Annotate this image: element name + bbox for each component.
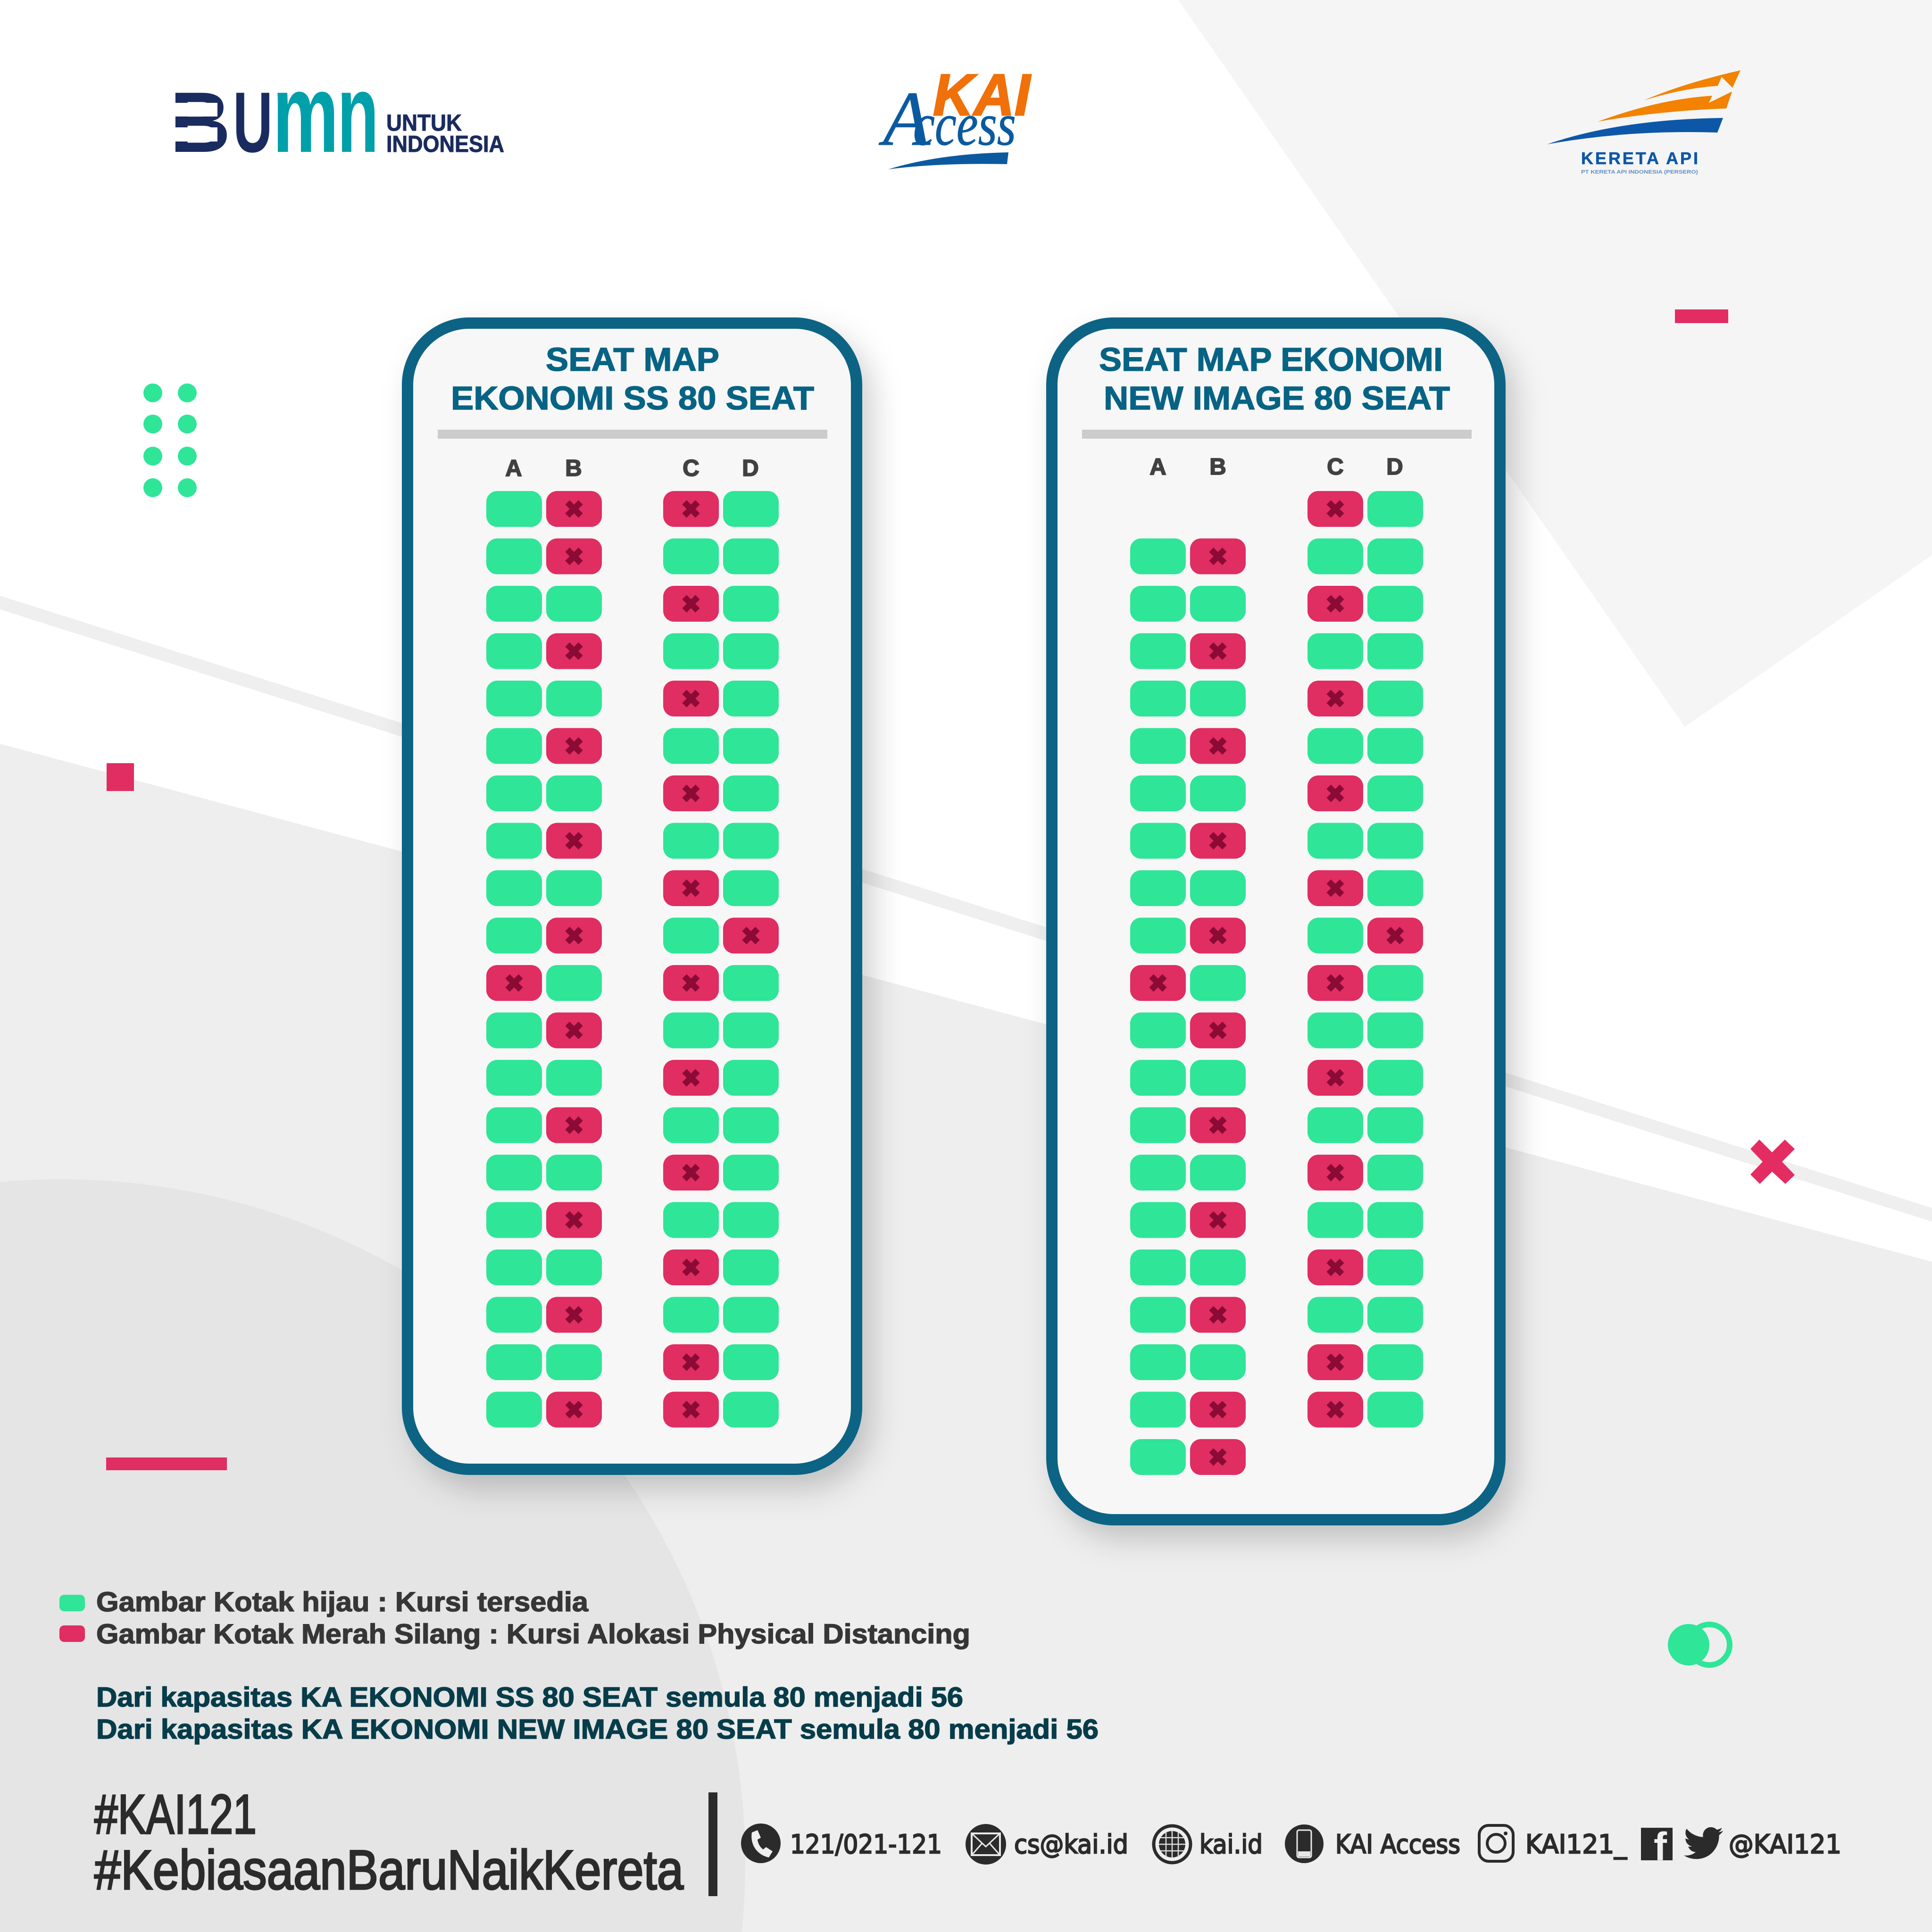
seat row 3	[1130, 586, 1423, 622]
seat row 6	[486, 728, 779, 764]
capacity note: Dari kapasitas KA EKONOMI SS 80 SEAT semula 80 menjadi 56	[96, 1682, 963, 1713]
seat row 2	[1130, 539, 1423, 575]
hashtags: #KebiasaanBaruNaikKereta	[94, 1839, 683, 1901]
column labels: A	[505, 456, 522, 481]
legend swatch: green	[59, 1595, 85, 1611]
logo: Kereta Api	[1547, 70, 1740, 175]
icon: mobile app	[1285, 1824, 1324, 1863]
seat row 18	[486, 1297, 779, 1333]
panel heading: SEAT MAP	[546, 341, 719, 378]
seat row 17	[1130, 1249, 1423, 1285]
column labels: D	[742, 456, 759, 481]
logo: KAI Access: A	[878, 75, 931, 162]
background: top right grey polygon	[1178, 0, 1932, 727]
logo: Kereta Api: KERETA API	[1581, 149, 1698, 168]
seat row 15	[1130, 1155, 1423, 1191]
icon: facebook: f	[1654, 1824, 1667, 1869]
seat row 21	[1130, 1439, 1246, 1475]
icon: twitter	[1684, 1827, 1723, 1859]
seat row 6	[1130, 728, 1423, 764]
seat row 5	[1130, 681, 1423, 716]
decoration: green dots	[143, 383, 197, 497]
seat row 1	[1307, 491, 1423, 527]
icon: mail	[966, 1824, 1006, 1865]
seat row 18	[1130, 1297, 1423, 1333]
seat row 8	[486, 823, 779, 858]
background: lower grey polygon	[0, 744, 1932, 1932]
decoration: red square	[107, 763, 134, 791]
logo: KAI Access	[878, 63, 1031, 169]
panel heading: SEAT MAP EKONOMI	[1099, 341, 1443, 378]
legend swatch: red	[59, 1625, 85, 1642]
KAI Access label: KAI Access	[1335, 1829, 1460, 1859]
seat row 4	[486, 633, 779, 669]
seat row 11	[1130, 965, 1423, 1001]
capacity note	[96, 1682, 1099, 1745]
seat row 8	[1130, 823, 1423, 858]
column labels: B	[565, 456, 582, 481]
contact row	[741, 1824, 1841, 1869]
seat row 11	[486, 965, 779, 1001]
seat row 3	[486, 586, 779, 622]
logo: Kereta Api: PT KERETA API INDONESIA (PERSERO)	[1581, 169, 1698, 175]
column labels: A	[1149, 454, 1166, 480]
seat row 13	[486, 1060, 779, 1096]
logo: BUMN Untuk Indonesia: B	[170, 74, 231, 170]
column labels: D	[1386, 454, 1403, 480]
panel heading	[451, 341, 814, 416]
decoration: red cross	[1750, 1140, 1795, 1184]
logo: KAI Access: KAI	[933, 63, 1031, 128]
seat row 2	[486, 539, 779, 575]
seat row 7	[1130, 775, 1423, 811]
logo: BUMN Untuk Indonesia	[167, 51, 504, 176]
legend text: green: Gambar Kotak hijau : Kursi tersedia	[96, 1587, 589, 1617]
vertical separator	[708, 1792, 717, 1896]
column labels: C	[1327, 454, 1344, 480]
logo: KAI Access: ccess	[913, 91, 1016, 158]
seat row 20	[1130, 1391, 1423, 1427]
decoration: green toggle circles	[1668, 1624, 1730, 1666]
seat row 1	[486, 491, 779, 527]
seat row 16	[1130, 1202, 1423, 1238]
seat row 20	[486, 1391, 779, 1427]
legend	[59, 1587, 970, 1649]
seat row 5	[486, 681, 779, 716]
seat row 12	[486, 1012, 779, 1048]
logo: BUMN Untuk Indonesia: UNTUK	[386, 110, 462, 136]
seat row 9	[486, 870, 779, 906]
seat row 7	[486, 775, 779, 811]
column labels: B	[1209, 454, 1226, 480]
seat row 10	[1130, 918, 1423, 954]
instagram handle: KAI121_	[1525, 1829, 1627, 1859]
divider	[438, 430, 827, 439]
icon: phone	[741, 1824, 781, 1863]
legend text: red: Gambar Kotak Merah Silang : Kursi Alokasi Physical Distancing	[96, 1619, 970, 1649]
seat row 4	[1130, 633, 1423, 669]
seat row 10	[486, 918, 779, 954]
icon: facebook	[1641, 1824, 1673, 1869]
logo: BUMN Untuk Indonesia: U	[233, 74, 273, 170]
logo: BUMN Untuk Indonesia: n	[337, 51, 379, 176]
icon: instagram	[1479, 1825, 1513, 1861]
seat row 12	[1130, 1012, 1423, 1048]
decoration: red bar top right	[1675, 309, 1728, 323]
column labels: C	[683, 456, 700, 481]
seat row 19	[486, 1344, 779, 1380]
decoration: red bar bottom left	[106, 1457, 227, 1470]
panel heading	[1099, 341, 1450, 416]
seat grid	[486, 491, 779, 1427]
icon: globe	[1154, 1826, 1191, 1863]
panel heading: EKONOMI SS 80 SEAT	[451, 380, 814, 416]
hashtags	[94, 1783, 683, 1901]
seat row 14	[1130, 1108, 1423, 1143]
seat row 19	[1130, 1344, 1423, 1380]
seat row 17	[486, 1249, 779, 1285]
logo: BUMN Untuk Indonesia: m	[273, 51, 339, 176]
panel frame	[1052, 323, 1500, 1520]
background: large grey circle	[0, 1179, 745, 1932]
seat row 16	[486, 1202, 779, 1238]
panel: seat map ekonomi new image 80 seat	[1052, 323, 1500, 1520]
phone number: 121/021-121	[790, 1829, 942, 1859]
column labels	[505, 456, 759, 481]
panel heading: NEW IMAGE 80 SEAT	[1104, 380, 1450, 416]
email: cs@kai.id	[1014, 1829, 1128, 1859]
background: diagonal grey band	[0, 596, 1932, 1222]
panel frame	[408, 323, 857, 1469]
capacity note: Dari kapasitas KA EKONOMI NEW IMAGE 80 SEAT semula 80 menjadi 56	[96, 1714, 1099, 1745]
hashtags: #KAI121	[94, 1783, 257, 1846]
seat row 14	[486, 1108, 779, 1143]
divider	[1082, 430, 1472, 439]
website: kai.id	[1199, 1829, 1263, 1859]
panel: seat map ekonomi SS 80 seat	[408, 323, 857, 1469]
seat grid	[1130, 491, 1423, 1475]
column labels	[1149, 454, 1403, 480]
seat row 13	[1130, 1060, 1423, 1096]
seat row 15	[486, 1155, 779, 1191]
seat row 9	[1130, 870, 1423, 906]
twitter handle: @KAI121	[1729, 1829, 1841, 1859]
logo: BUMN Untuk Indonesia: INDONESIA	[386, 132, 504, 157]
